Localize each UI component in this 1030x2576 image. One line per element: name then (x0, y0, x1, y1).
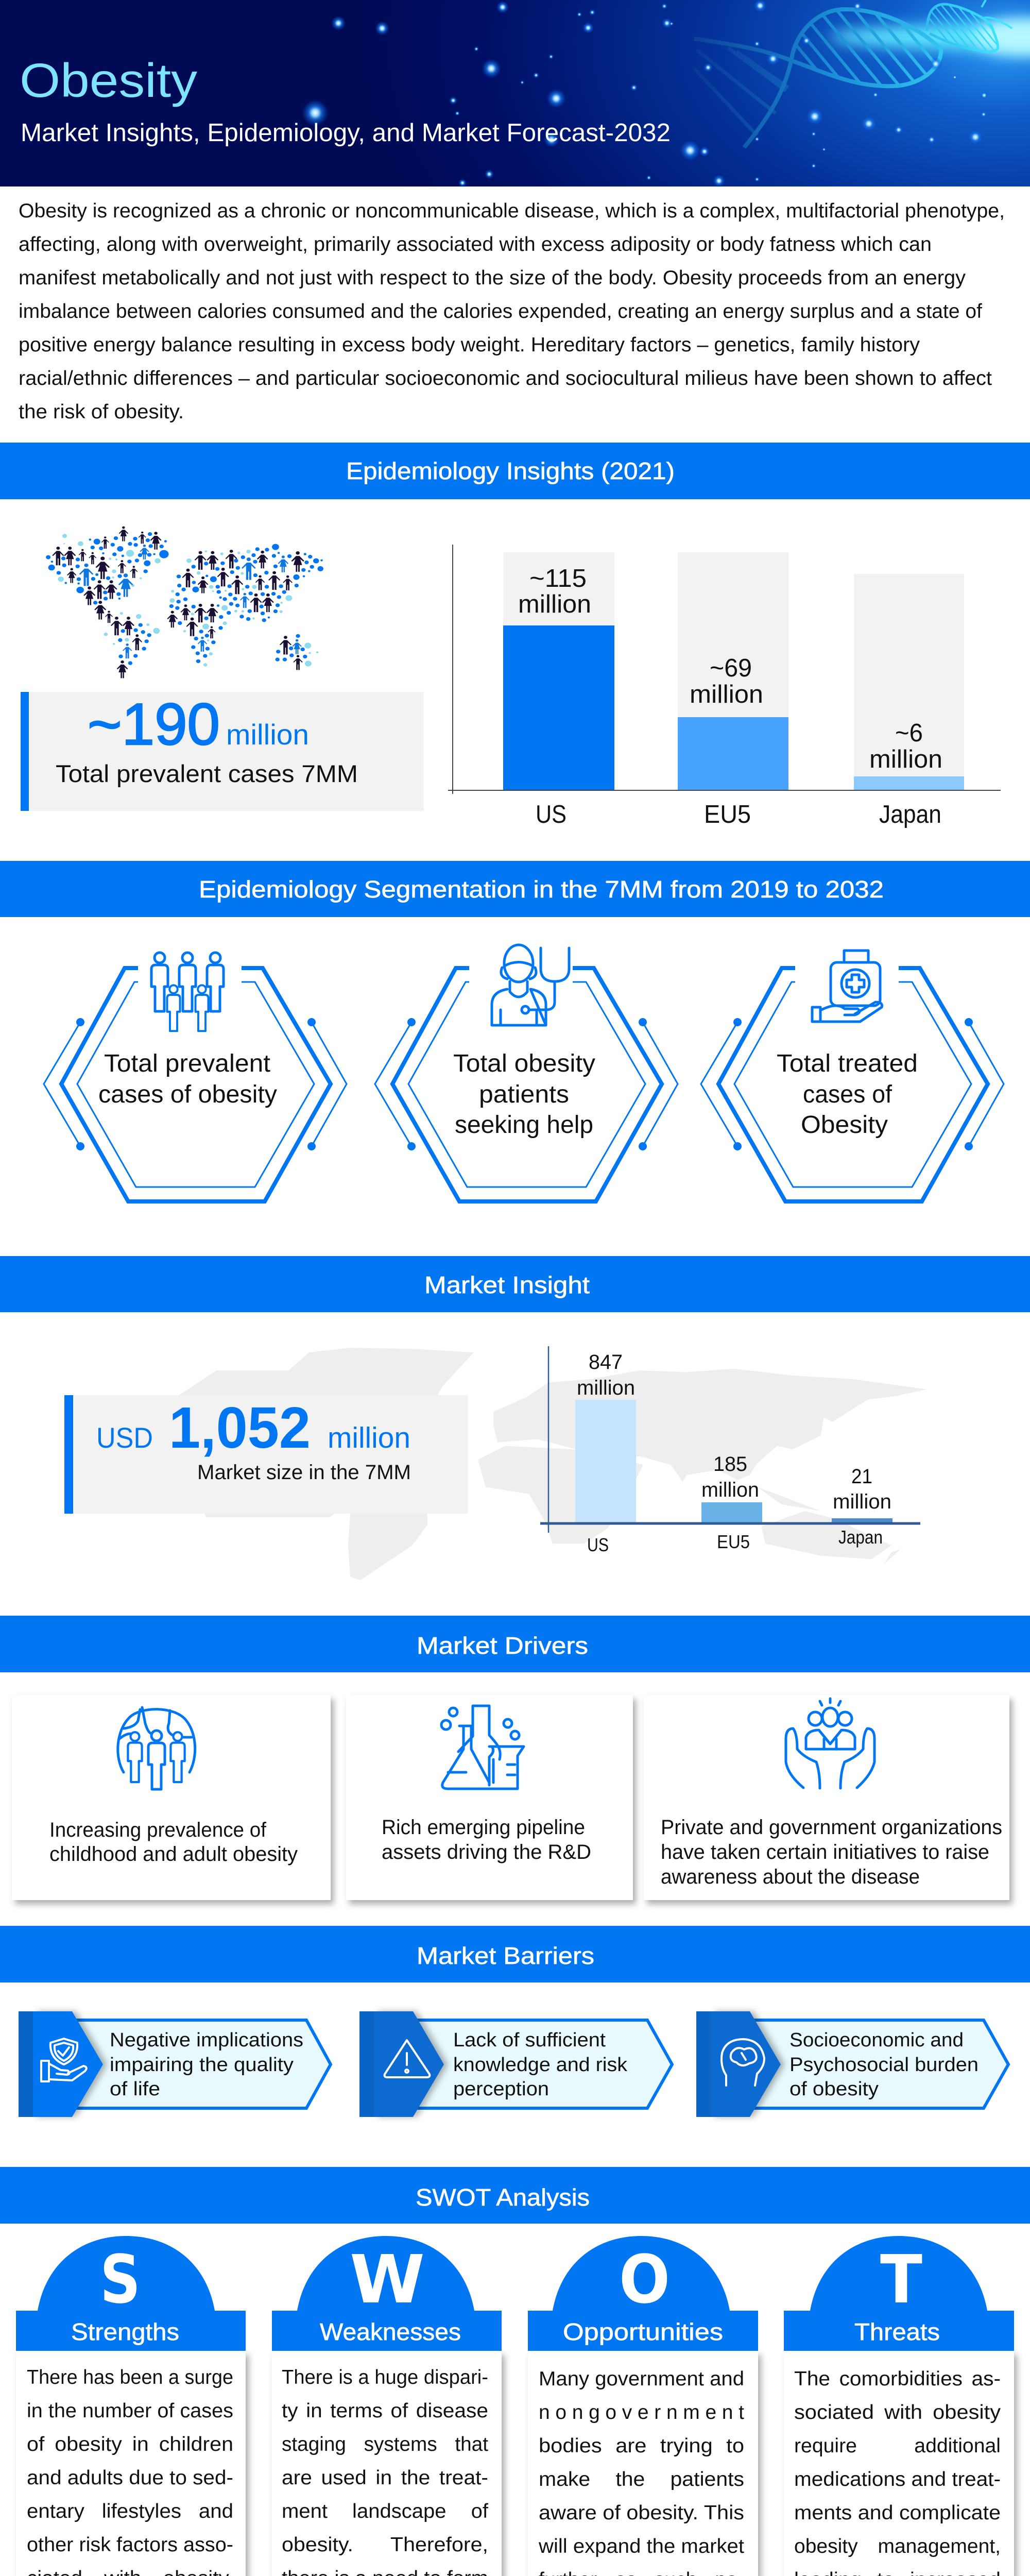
barrier: negative implications: impairing the quality (110, 2054, 294, 2076)
panel: driver organizations awareness: Private and government organizations (661, 1816, 1002, 1839)
barrier: negative implications (19, 2011, 331, 2117)
panel: weaknesses: ty in terms of disease (282, 2400, 488, 2422)
icon: globe with people (118, 1707, 195, 1789)
bar chart: market size by region: 847 (589, 1351, 623, 1374)
panel: strengths: in the number of cases (27, 2400, 233, 2422)
panel: opportunities: Opportunities (563, 2318, 723, 2345)
panel: threats: obesity management, (794, 2535, 1001, 2557)
intro text block: manifest metabolically and not just with respect to the size of the body. Obesity proceeds from an energy (19, 267, 966, 289)
callout: total prevalent cases: million (226, 718, 309, 751)
callout: total prevalent cases: Total prevalent cases 7MM (56, 760, 358, 787)
panel: threats: require additional (794, 2435, 1001, 2457)
panel: weaknesses: Weaknesses (320, 2318, 461, 2345)
panel: driver organizations awareness: awareness about the disease (661, 1866, 920, 1888)
panel: driver organizations awareness: have taken certain initiatives to raise (661, 1841, 989, 1863)
callout: market size: 1,052 (169, 1395, 311, 1460)
panel: strengths: other risk factors asso- (27, 2534, 233, 2556)
bar chart: prevalent cases by region: ~115 (529, 565, 587, 592)
bar chart: prevalent cases by region: million (690, 681, 763, 708)
hexagon: treated cases (701, 951, 1004, 1201)
panel: driver emerging pipeline: Rich emerging pipeline (382, 1816, 585, 1839)
panel: threats: medications and treat- (794, 2468, 1001, 2490)
bar chart: prevalent cases by region (448, 545, 1001, 828)
icon: group of people (151, 953, 224, 1031)
hexagon: patients seeking help: patients (479, 1081, 569, 1108)
heading: epidemiology insights (0, 443, 1030, 499)
panel: opportunities (528, 2236, 758, 2576)
panel: opportunities: aware of obesity. This (539, 2502, 744, 2524)
panel: weaknesses (272, 2236, 502, 2576)
icon: warning triangle (385, 2040, 430, 2077)
panel: weaknesses: staging systems that (282, 2433, 488, 2455)
panel: strengths: of obesity in children (27, 2433, 233, 2455)
panel: driver childhood and adult obesity: childhood and adult obesity (49, 1843, 298, 1866)
panel: weaknesses: W (350, 2241, 425, 2318)
stars (302, 0, 988, 187)
barrier: negative implications: Negative implications (110, 2029, 303, 2051)
heading: epidemiology segmentation: Epidemiology Segmentation in the 7MM from 2019 to 2032 (199, 876, 884, 903)
callout: market size: USD (96, 1421, 153, 1454)
panel: driver emerging pipeline (346, 1695, 633, 1900)
bar chart: market size by region: million (577, 1377, 635, 1399)
panel: opportunities: make the patients (539, 2468, 744, 2490)
panel: strengths: Strengths (71, 2318, 179, 2345)
intro text block: the risk of obesity. (19, 401, 184, 423)
panel: opportunities: will expand the market (538, 2535, 744, 2557)
barrier: socioeconomic burden: Psychosocial burden (789, 2054, 978, 2076)
bar chart: market size by region: 185 (713, 1453, 747, 1476)
panel: weaknesses: are used in the treat- (282, 2467, 488, 2489)
bar chart: market size by region: Japan (838, 1527, 883, 1548)
bar chart: market size by region: 21 (851, 1465, 872, 1488)
hexagon: patients seeking help (375, 945, 678, 1201)
heading: market drivers: Market Drivers (417, 1632, 588, 1659)
subtitle: Market Insights, Epidemiology, and Market Forecast-2032 (21, 119, 671, 147)
barrier: lack of knowledge: knowledge and risk (453, 2054, 628, 2076)
panel: threats (784, 2236, 1014, 2576)
panel: strengths: and adults due to sed- (27, 2467, 233, 2489)
hexagon: patients seeking help: seeking help (455, 1111, 593, 1139)
panel: threats: ments and complicate (794, 2502, 1001, 2524)
heading: swot analysis (0, 2167, 1030, 2224)
bar chart: prevalent cases by region: ~69 (710, 654, 752, 682)
bar chart: prevalent cases by region: million (869, 745, 942, 773)
heading: epidemiology insights: Epidemiology Insights (2021) (346, 457, 675, 484)
heading: market drivers (0, 1616, 1030, 1672)
panel: threats: Threats (854, 2318, 940, 2345)
bar chart: market size by region: EU5 (717, 1531, 750, 1552)
icon: medicine in hand (812, 951, 882, 1022)
heading: market insight: Market Insight (424, 1272, 590, 1298)
bar chart: market size by region: million (701, 1479, 759, 1501)
panel: driver organizations awareness (644, 1695, 1009, 1900)
bar chart: prevalent cases by region: EU5 (704, 801, 751, 828)
intro text block: racial/ethnic differences – and particular socioeconomic and sociocultural milieus have been shown to affect (19, 367, 992, 389)
hexagon: total prevalent cases: Total prevalent (104, 1050, 270, 1077)
icon: lab flasks (441, 1706, 524, 1789)
bar chart: prevalent cases by region: ~6 (895, 719, 923, 747)
panel: opportunities: nongovernment (539, 2401, 744, 2424)
panel: opportunities: Many government and (539, 2368, 744, 2390)
bar chart: prevalent cases by region: million (518, 590, 591, 618)
heading: swot analysis: SWOT Analysis (416, 2184, 590, 2211)
title: Obesity (20, 54, 198, 107)
barrier: socioeconomic burden (696, 2011, 1008, 2117)
bar chart: prevalent cases by region: Japan (879, 801, 941, 828)
hexagon: treated cases: Total treated (777, 1050, 918, 1077)
hexagon: total prevalent cases: cases of obesity (98, 1081, 277, 1108)
bar chart: market size by region: US (587, 1534, 609, 1555)
hexagon: total prevalent cases (44, 953, 347, 1201)
header banner (0, 0, 1030, 187)
panel: strengths: There has been a surge (27, 2366, 233, 2388)
intro text block: Obesity is recognized as a chronic or noncommunicable disease, which is a complex, multifactorial phenotype, (19, 200, 1005, 222)
intro text block: positive energy balance resulting in excess body weight. Hereditary factors – genetics, family history (19, 334, 920, 356)
heading: market barriers (0, 1926, 1030, 1982)
panel: weaknesses: There is a huge dispari- (282, 2366, 488, 2388)
bar chart: market size by region (540, 1346, 920, 1555)
panel: opportunities: bodies are trying to (539, 2435, 744, 2457)
panel: threats: sociated with obesity (794, 2401, 1001, 2424)
callout: market size: million (328, 1421, 410, 1454)
icon: doctor (492, 945, 569, 1025)
icon: world map of people (46, 527, 323, 678)
icon: hands holding people (786, 1699, 874, 1788)
barrier: socioeconomic burden: Socioeconomic and (789, 2029, 964, 2051)
barrier: lack of knowledge (359, 2011, 672, 2117)
bar chart: prevalent cases by region: US (536, 801, 566, 828)
hexagon: treated cases: Obesity (801, 1111, 888, 1139)
callout: market size: Market size in the 7MM (197, 1461, 411, 1484)
intro text block (19, 200, 1005, 423)
panel: driver childhood and adult obesity: Increasing prevalence of (49, 1819, 267, 1841)
panel: weaknesses: ment landscape of (282, 2500, 488, 2522)
heading: market barriers: Market Barriers (417, 1942, 594, 1969)
panel: strengths (16, 2236, 246, 2576)
barrier: lack of knowledge: Lack of sufficient (453, 2029, 606, 2051)
hexagon: patients seeking help: Total obesity (453, 1050, 595, 1077)
panel: strengths: entary lifestyles and (27, 2500, 233, 2522)
callout: total prevalent cases (21, 692, 424, 811)
callout: total prevalent cases: ~190 (88, 692, 220, 757)
barrier: negative implications: of life (110, 2078, 160, 2100)
world map background (154, 1348, 927, 1580)
heading: market insight (0, 1256, 1030, 1312)
icon: shield in hand (41, 2039, 87, 2081)
heading: epidemiology segmentation (0, 861, 1030, 917)
icon: head with brain (722, 2039, 764, 2086)
bar chart: market size by region: million (833, 1490, 891, 1513)
panel: threats: The comorbidities as- (794, 2368, 1001, 2390)
panel: driver emerging pipeline: assets driving the R&D (382, 1841, 591, 1863)
callout: market size (64, 1395, 468, 1514)
panel: opportunities: O (619, 2241, 670, 2318)
panel: driver childhood and adult obesity (12, 1695, 331, 1900)
panel: strengths: S (100, 2241, 141, 2318)
intro text block: affecting, along with overweight, primarily associated with excess adiposity or body fatness which can (19, 233, 932, 256)
barrier: lack of knowledge: perception (453, 2078, 549, 2100)
intro text block: imbalance between calories consumed and the calories expended, creating an energy surplus and a state of (19, 300, 982, 323)
barrier: socioeconomic burden: of obesity (789, 2078, 879, 2100)
hexagon: treated cases: cases of (803, 1081, 892, 1108)
icon: dna helix (694, 0, 1015, 147)
panel: weaknesses: obesity. Therefore, (282, 2534, 488, 2556)
panel: threats: T (880, 2241, 922, 2318)
